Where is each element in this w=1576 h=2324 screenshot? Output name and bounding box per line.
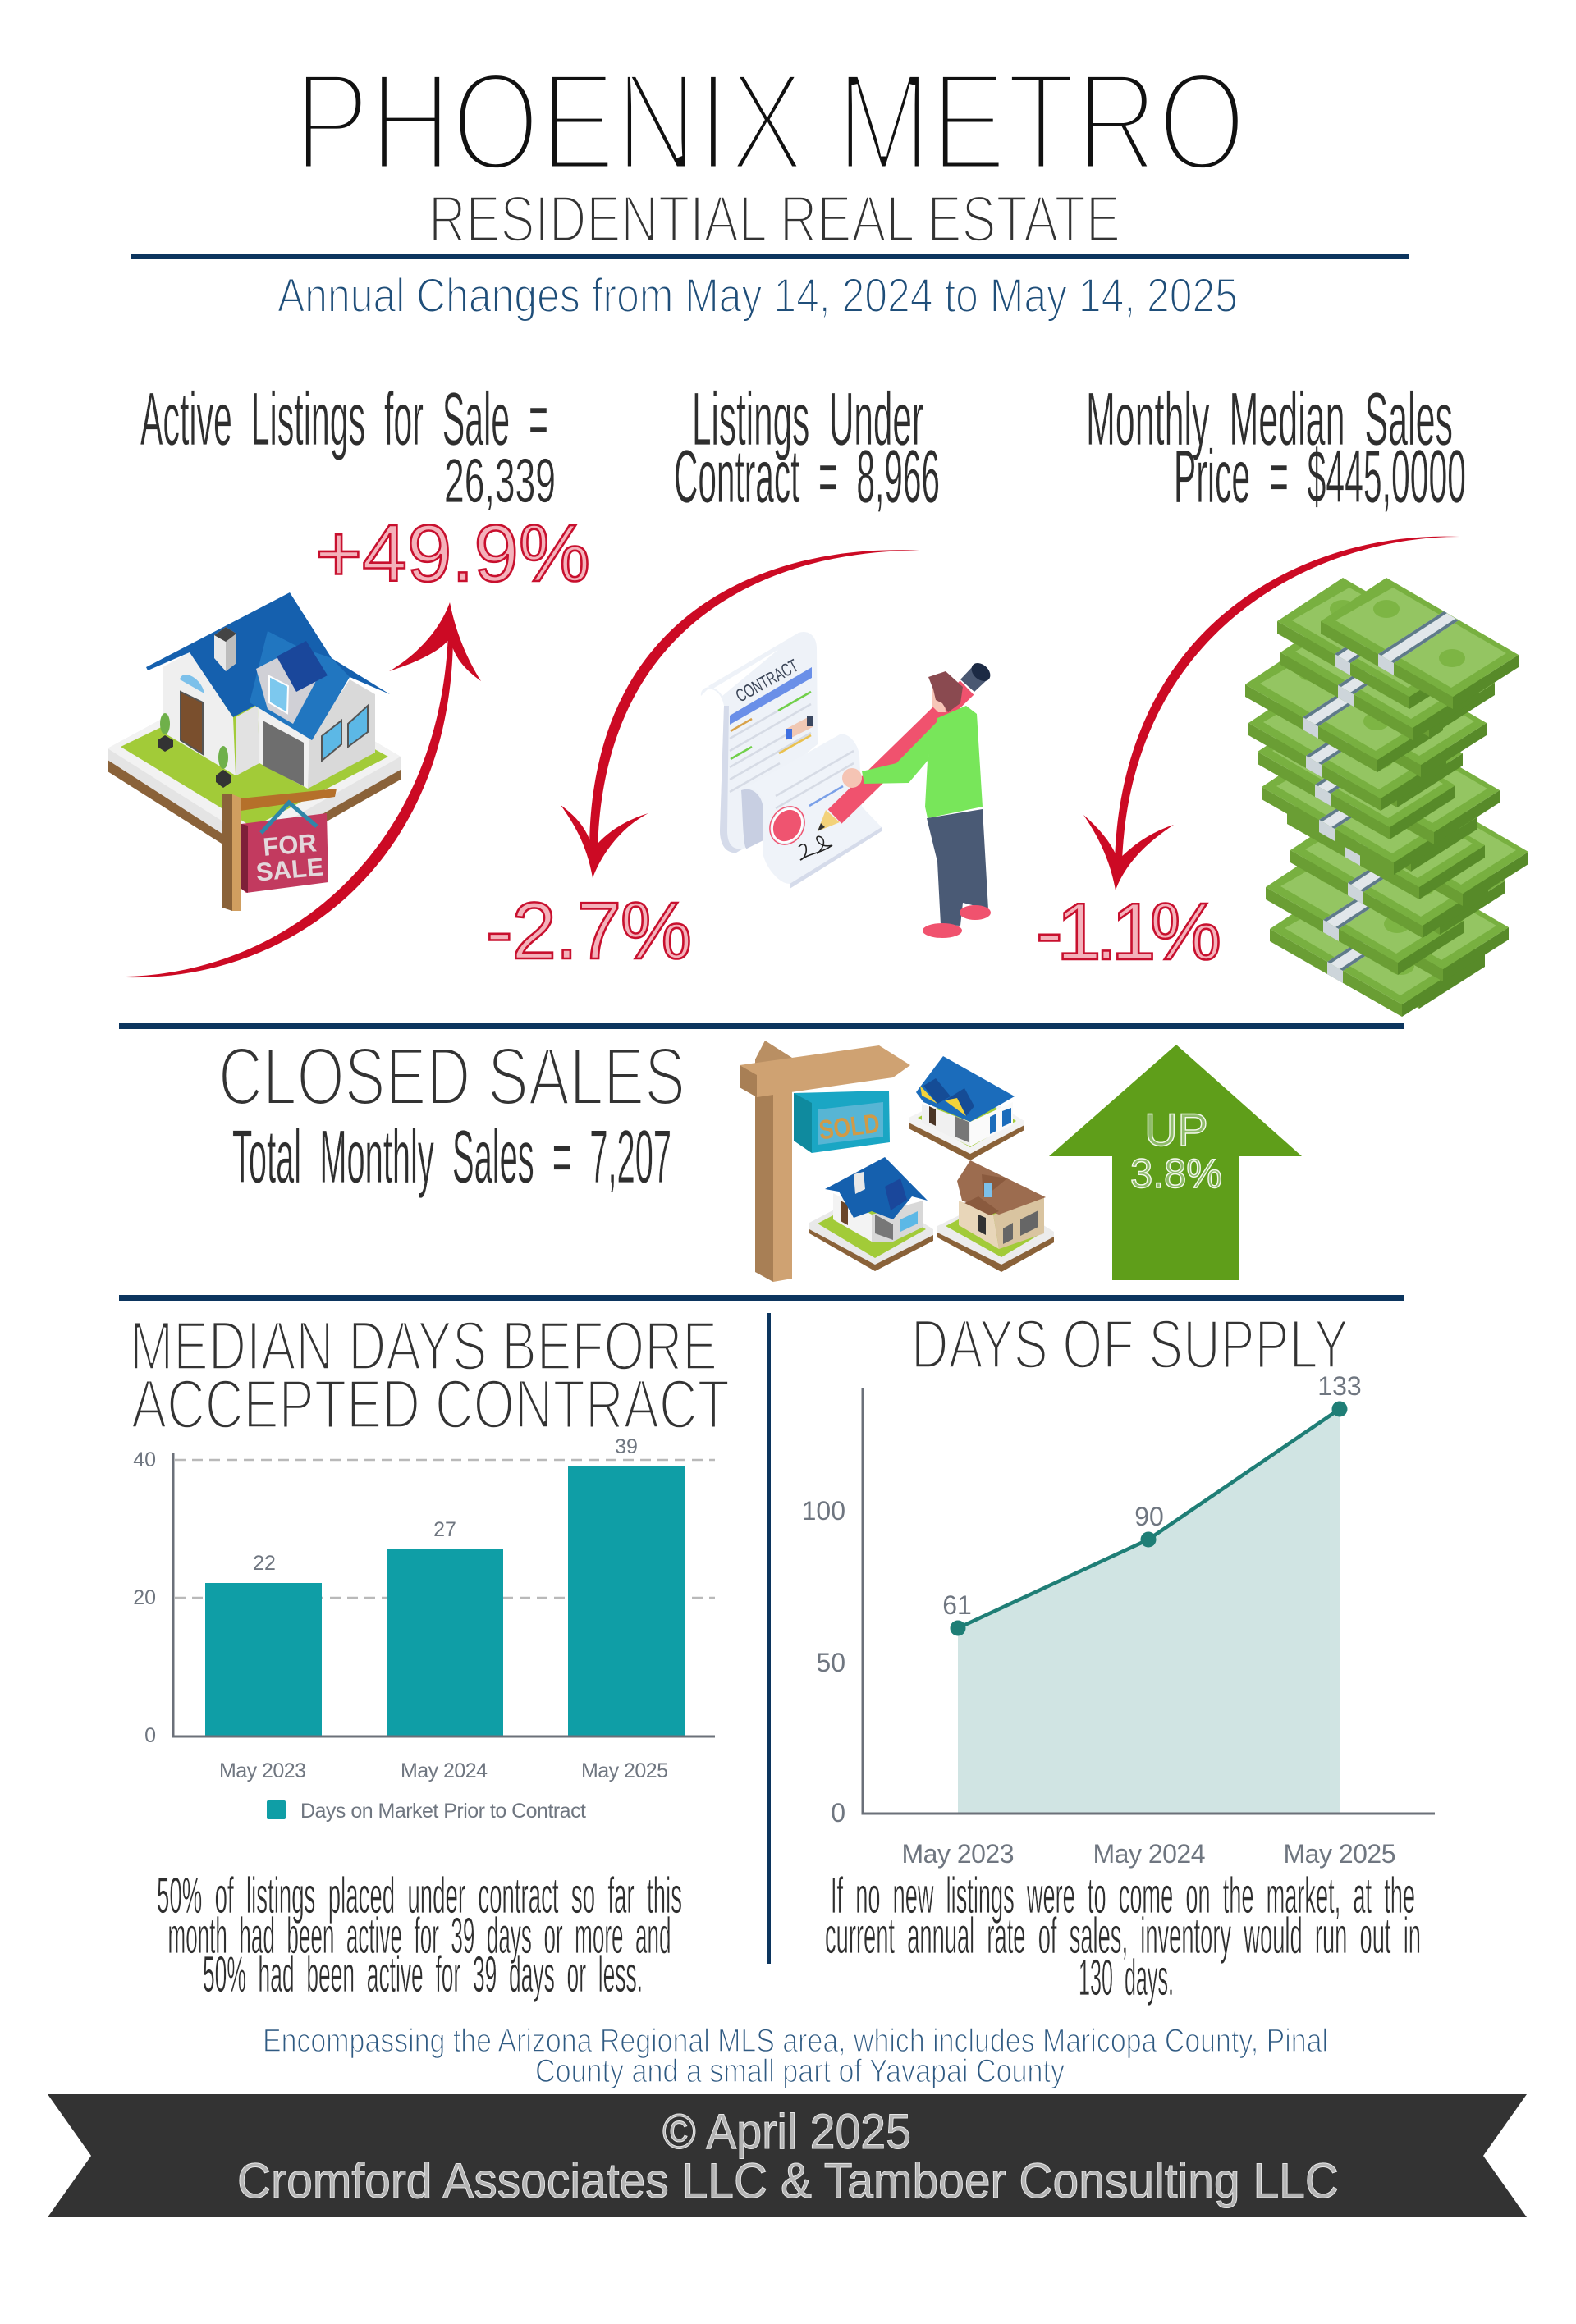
bar: May 2023 [205,1583,322,1736]
area line chart: 0 [831,1798,845,1828]
icon: house for sale [108,592,401,911]
panel: listings under contract [486,377,994,976]
panel: closed sales: Total Monthly Sales = 7,207 [232,1115,671,1199]
coverage note [263,2023,1328,2089]
header rule [131,254,1409,259]
active listings change value: +49.9% [315,508,590,598]
infographic canvas: 50% of listings placed under contract so far this [157,1868,682,1924]
area line chart: 100 [802,1496,845,1526]
days of supply note [825,1868,1421,2006]
infographic canvas: month had been active for 39 days or more and [167,1908,671,1965]
coverage note: Encompassing the Arizona Regional MLS area, which includes Maricopa County, Pinal [263,2023,1328,2059]
arrow: up 3.8%: UP [1144,1104,1208,1155]
icon: house for sale: SALE [254,853,325,887]
panel: listings under contract: Listings Under [692,377,923,461]
copyright date: © April 2025 [662,2104,911,2159]
icon: contract signing: CONTRACT [732,655,802,706]
area line chart: May 2024 [1093,1839,1205,1869]
infographic canvas: Active Listings for Sale = [140,377,548,461]
chart legend: Days on Market Prior to Contract [300,1800,586,1823]
arrow: up 3.8%: 3.8% [1130,1151,1222,1196]
icon: house brown roof [937,1160,1054,1272]
closed sales heading: CLOSED SALES [218,1031,685,1123]
column divider [767,1313,771,1964]
icon: house for sale: FOR [262,828,318,862]
bar: May 2025 [568,1466,685,1736]
panel: active listings [108,377,590,977]
bar chart: May 2024 [401,1759,488,1782]
area line chart: 90 [1134,1502,1164,1531]
icon: house blue roof [809,1157,933,1271]
arrow: up [108,602,481,977]
icon: sold sign [740,1041,910,1282]
active listings label: 26,339 [444,446,556,516]
median days heading [130,1307,730,1443]
coverage note: County and a small part of Yavapai County [535,2053,1065,2089]
company names: Cromford Associates LLC & Tamboer Consulting LLC [237,2153,1339,2208]
icon: contract signing [701,632,994,938]
area line chart: May 2023 [901,1839,1015,1869]
panel: median days before contract [130,1307,730,2003]
area line chart [802,1371,1435,1869]
area line chart: 133 [1317,1371,1362,1401]
panel: median sales price [1036,377,1528,1017]
bar: May 2024 [387,1549,503,1736]
icon: money stack [1245,578,1528,1017]
bar chart: 0 [144,1724,156,1747]
bar chart: 20 [133,1586,156,1609]
bar chart: 40 [133,1448,156,1471]
panel: days of supply [802,1306,1435,2006]
median price label [1086,377,1466,519]
bar chart [133,1435,715,1782]
title: PHOENIX METRO [294,43,1246,200]
days of supply heading: DAYS OF SUPPLY [911,1306,1349,1383]
date range subheading: Annual Changes from May 14, 2024 to May 14, 2025 [277,269,1238,323]
active listings label [140,377,556,516]
bar chart: May 2025 [581,1759,668,1782]
section rule [119,1023,1404,1029]
area line chart: 61 [942,1590,972,1620]
under contract label [674,377,940,519]
area line chart: May 2025 [1284,1839,1395,1869]
icon: house blue dormers [909,1056,1024,1160]
median days heading: MEDIAN DAYS BEFORE [130,1307,717,1384]
section rule [119,1295,1404,1301]
arrow: down [561,550,919,878]
median days heading: ACCEPTED CONTRACT [131,1366,730,1443]
area line chart: 50 [816,1648,845,1677]
bar chart: 22 [253,1552,276,1575]
icon: sold sign: SOLD [818,1108,882,1145]
footer banner [48,2094,1527,2217]
subtitle: RESIDENTIAL REAL ESTATE [428,182,1120,255]
bar chart: May 2023 [219,1759,306,1782]
median price change value: -1.1% [1036,886,1221,977]
under contract change value: -2.7% [486,885,692,976]
bar chart: 27 [433,1518,456,1541]
bar chart: 39 [615,1435,638,1458]
panel: listings under contract: Contract = 8,966 [674,435,940,519]
median days note [157,1868,682,2003]
days of supply note: 130 days. [1079,1950,1174,2006]
arrow: up 3.8% [1049,1045,1302,1280]
panel: median days before contract: 50% had been active for 39 days or less. [203,1947,643,2003]
arrow: down [1084,537,1459,890]
panel: closed sales [218,1031,1302,1282]
